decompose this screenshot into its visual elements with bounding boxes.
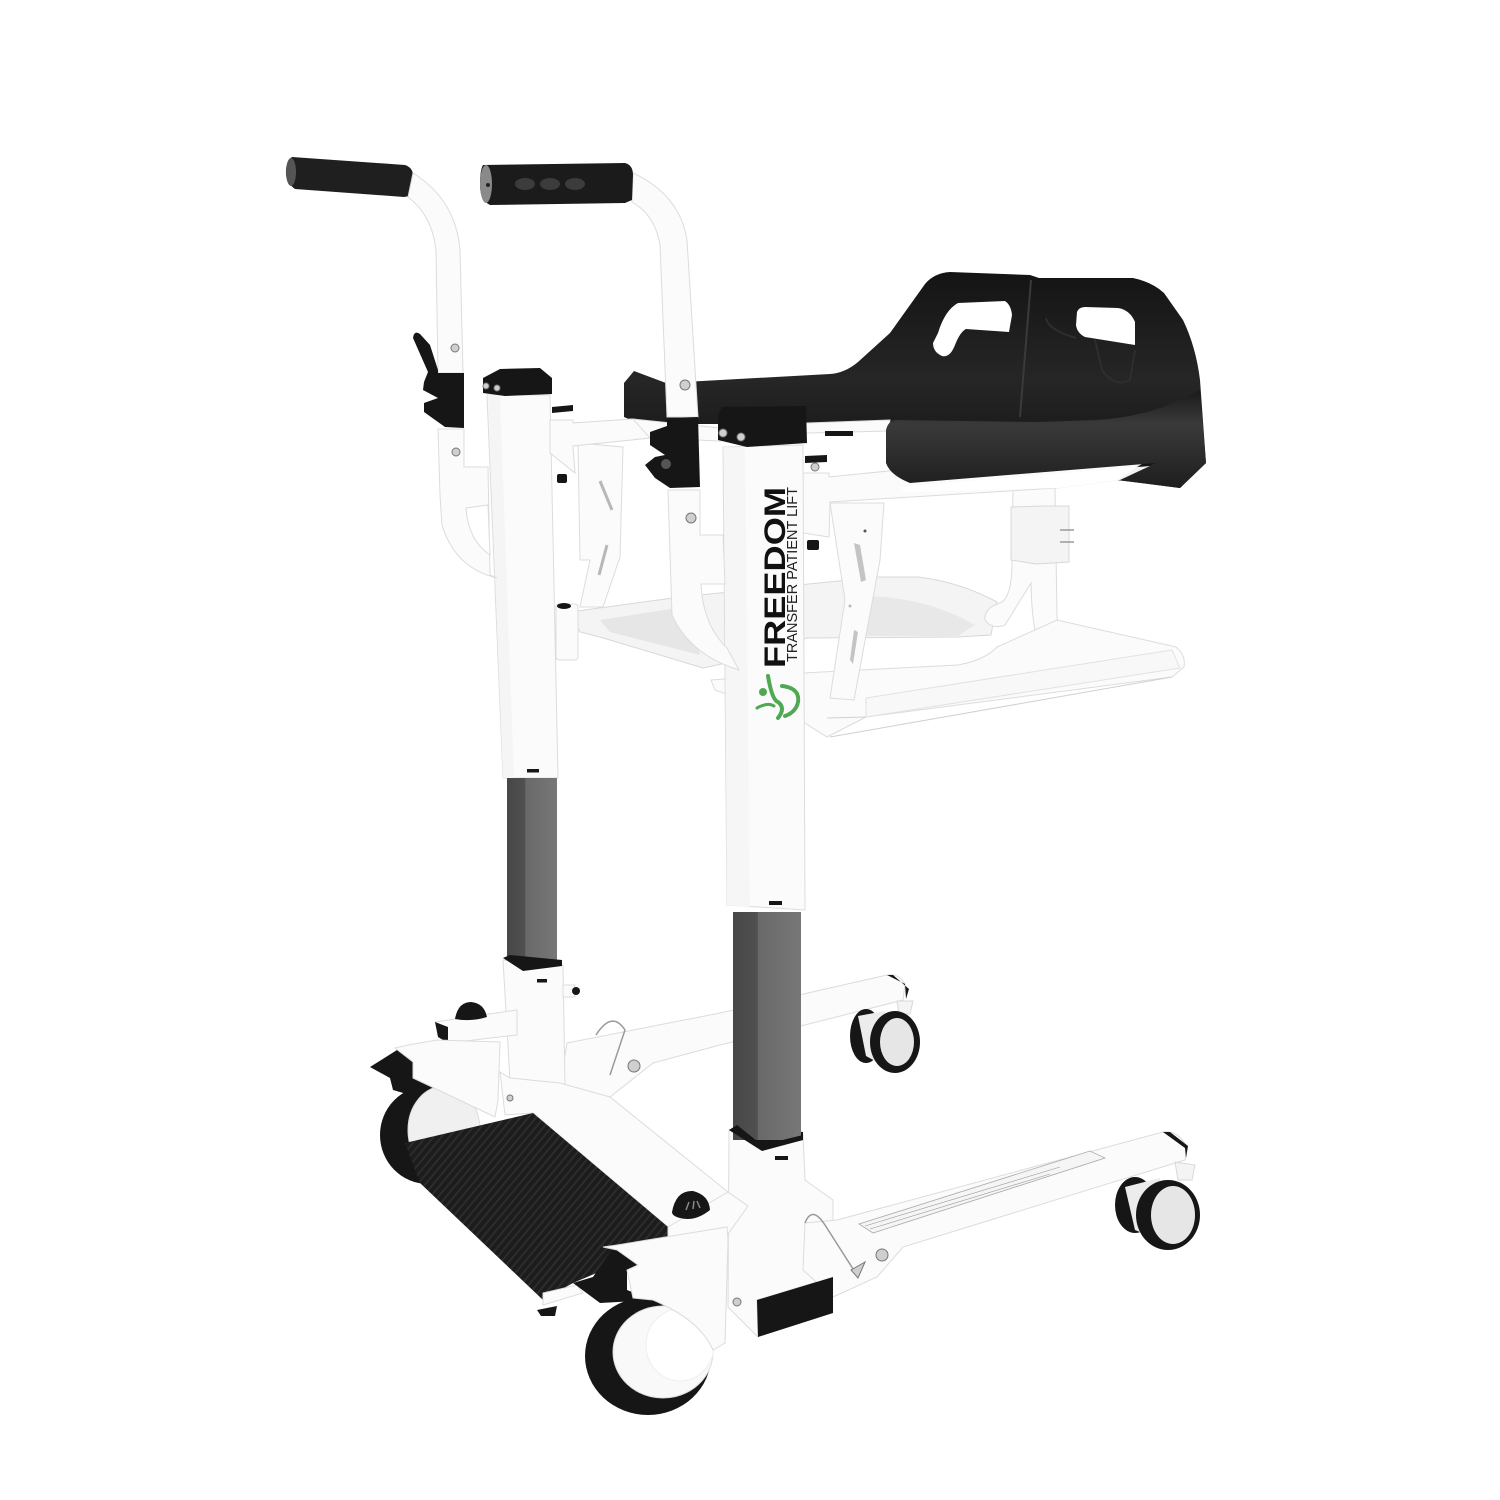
top bar with knob xyxy=(435,1010,517,1043)
left post sleeve xyxy=(503,955,580,1085)
left column cap xyxy=(483,368,552,396)
wheel hub xyxy=(613,1306,713,1398)
base foot cap xyxy=(757,1277,833,1337)
left clamp xyxy=(413,333,464,428)
armrest xyxy=(886,390,1206,492)
left upright tube xyxy=(408,173,463,373)
seat support post xyxy=(985,486,1075,660)
left perforated strap xyxy=(578,443,623,607)
front beam knob xyxy=(668,1191,748,1243)
wheel tyre xyxy=(585,1297,711,1415)
right column xyxy=(723,445,805,910)
right post xyxy=(729,912,803,1151)
right base foot xyxy=(728,1126,833,1337)
brand text: TRANSFER PATIENT LIFT xyxy=(785,487,801,662)
left rail and knuckle xyxy=(550,405,650,483)
footplate xyxy=(405,1113,668,1316)
left grip xyxy=(286,157,413,197)
seat back shell xyxy=(624,272,1206,488)
far rail xyxy=(573,419,890,446)
right upright tube xyxy=(632,173,698,417)
base beam xyxy=(500,1072,755,1234)
hand hole right xyxy=(1076,307,1135,345)
lever xyxy=(573,1248,653,1303)
left post xyxy=(507,778,557,964)
right seat rail xyxy=(803,455,1144,550)
lever xyxy=(370,1050,432,1097)
left lower U tube xyxy=(438,429,497,578)
right handle xyxy=(480,163,739,670)
rear seat plate xyxy=(556,577,997,668)
right column cap xyxy=(718,406,807,447)
hand hole left xyxy=(933,301,1012,356)
right clamp xyxy=(645,417,700,488)
lower base left xyxy=(370,1002,517,1184)
icon: green runner logo xyxy=(757,676,798,718)
right grip xyxy=(480,163,633,205)
fork xyxy=(603,1227,728,1350)
left handle xyxy=(286,157,497,578)
right strap xyxy=(830,503,884,700)
right leg caster xyxy=(1115,1162,1200,1250)
rear left castor wheel xyxy=(380,1086,476,1184)
brand text: FREEDOM xyxy=(759,487,792,668)
warning label xyxy=(859,1151,1105,1233)
left grip end cap xyxy=(286,158,296,186)
front caster xyxy=(573,1227,728,1415)
brand text xyxy=(759,487,801,668)
front seat plate xyxy=(711,620,1184,737)
fork xyxy=(395,1040,500,1117)
right leg xyxy=(803,1132,1188,1297)
left column xyxy=(487,395,558,778)
rear leg and caster xyxy=(560,975,920,1097)
right lower U tube xyxy=(668,490,739,670)
